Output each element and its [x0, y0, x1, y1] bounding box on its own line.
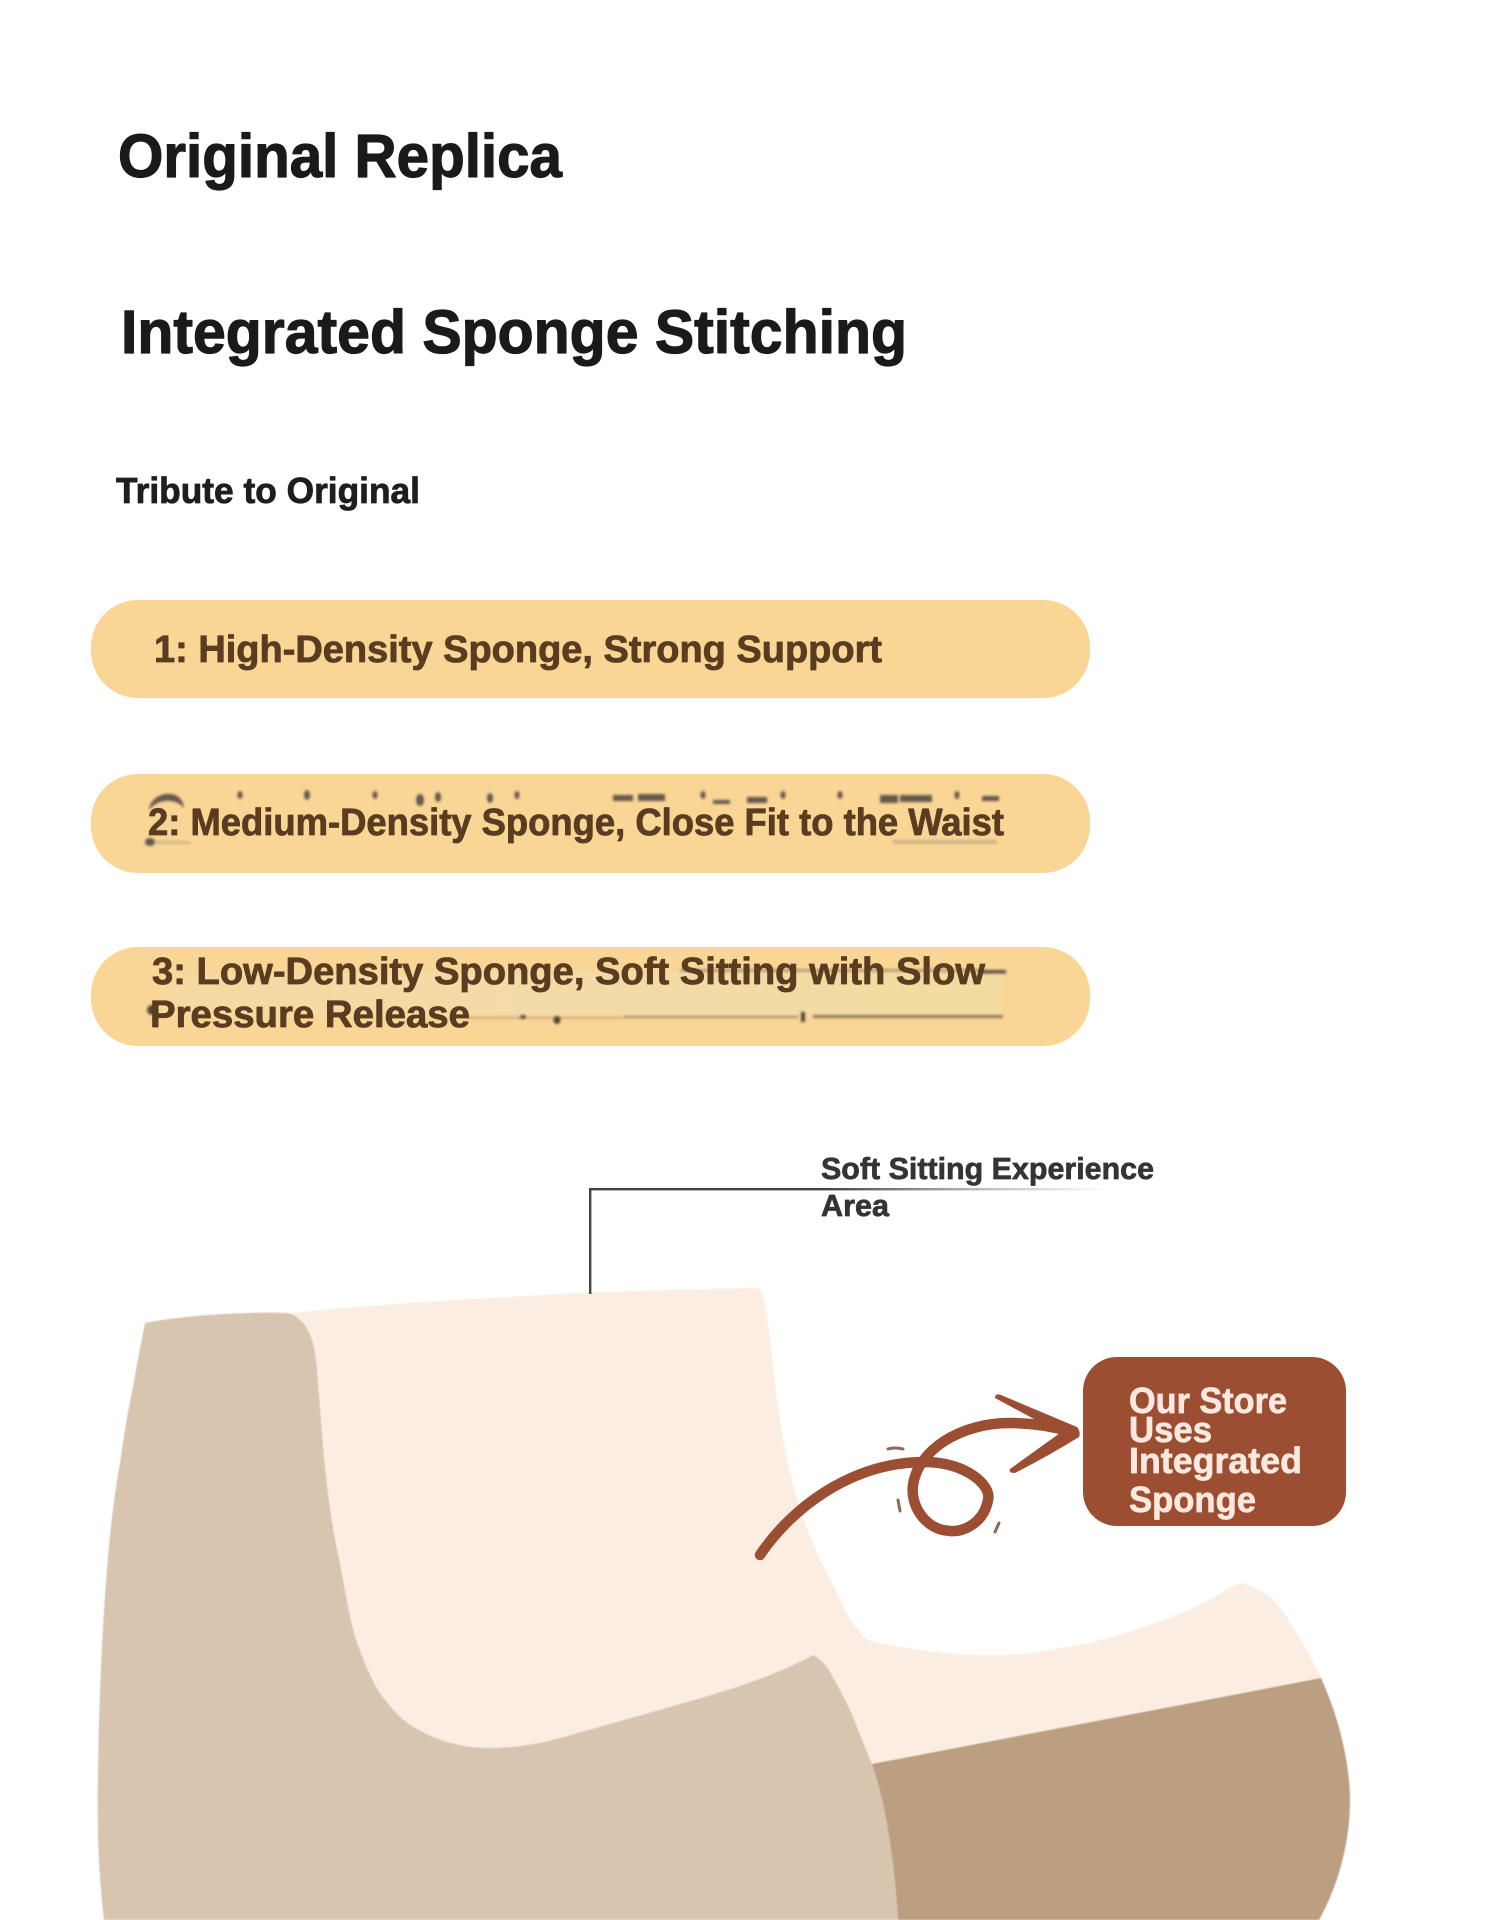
sofa: beige backrest and side — [98, 1313, 898, 1920]
heading: Integrated Sponge Stitching: Integrated Sponge Stitching — [121, 298, 907, 366]
badge: Our Store Uses Integrated Sponge: Our Store — [1129, 1380, 1287, 1421]
badge: Our Store Uses Integrated Sponge: Uses — [1129, 1409, 1212, 1450]
callout label: Soft Sitting Experience Area: Soft Sitting Experience — [821, 1151, 1154, 1186]
badge: Our Store Uses Integrated Sponge — [1083, 1357, 1346, 1526]
sofa: cream foam layer — [290, 1288, 1322, 1800]
pill: feature 3: Pressure Release — [150, 994, 470, 1036]
pill: feature 3: 3: Low-Density Sponge, Soft Sitting with Slow — [152, 951, 985, 993]
pill: feature 2: 2: Medium-Density Sponge, Close Fit to the Waist — [148, 802, 1004, 844]
callout label: Soft Sitting Experience Area: Area — [821, 1188, 890, 1223]
leader line: soft sitting area — [589, 1188, 1110, 1294]
badge: Our Store Uses Integrated Sponge: Integrated — [1129, 1440, 1302, 1481]
sofa illustration — [98, 1288, 1350, 1920]
badge: Our Store Uses Integrated Sponge: Sponge — [1129, 1479, 1256, 1520]
callout label: Soft Sitting Experience Area — [821, 1151, 1154, 1223]
arrow: curly arrow to badge — [760, 1394, 1080, 1555]
pill: feature 1 — [91, 600, 1090, 698]
pill: feature 1: 1: High-Density Sponge, Strong Support — [154, 629, 882, 671]
sofa: brown seat front — [872, 1678, 1350, 1920]
pill: feature 2 — [91, 774, 1090, 873]
pill: feature 3 — [91, 947, 1090, 1046]
subheading: Tribute to Original: Tribute to Original — [116, 470, 420, 511]
title: Original Replica: Original Replica — [118, 122, 563, 190]
